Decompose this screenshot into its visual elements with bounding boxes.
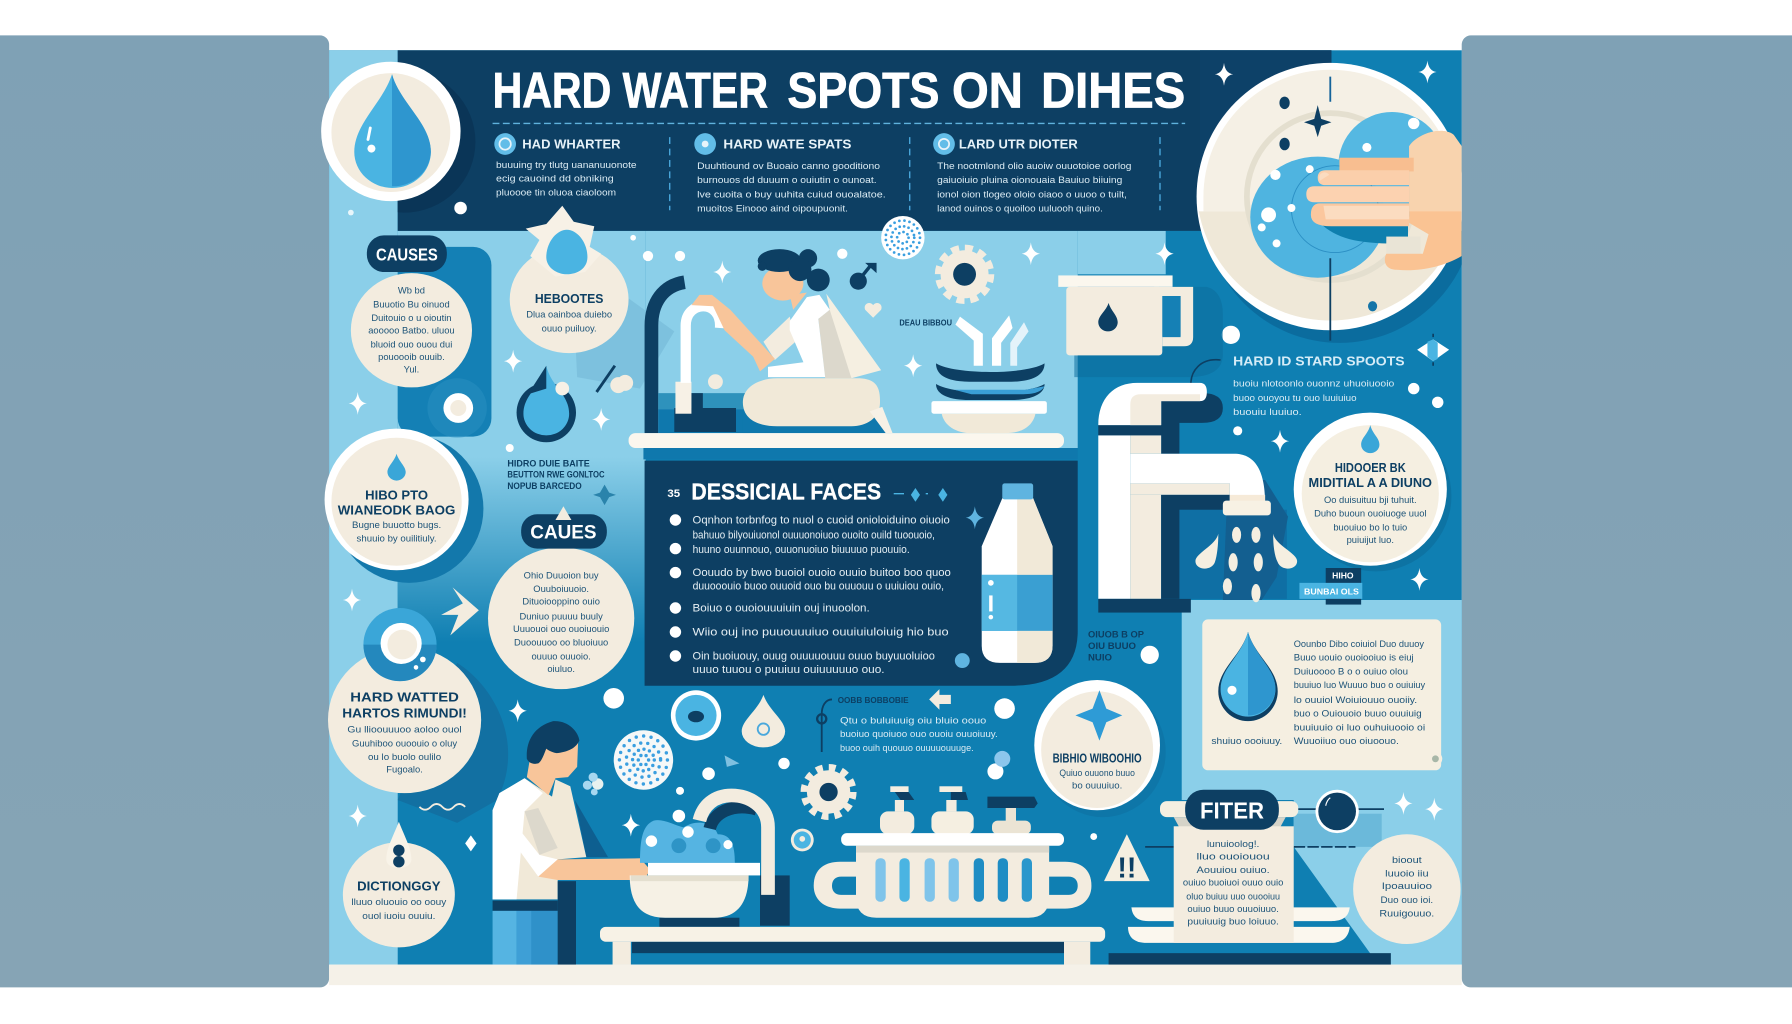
header column 1: ecig cauoind dd obniking (496, 174, 614, 184)
heart icon (865, 303, 882, 318)
main infographic background (329, 50, 1462, 985)
causes bubble (351, 235, 472, 387)
bubble: minimal a a diuno: buouiuo bo lo tuio (1333, 522, 1407, 532)
bubble: lower right: bioout (1392, 855, 1422, 865)
plates behind filter card (1128, 907, 1350, 943)
bullets (670, 514, 681, 662)
bubble: hibo pto: HIBO PTO (365, 488, 428, 502)
bullet text: Oouudo by bwo buoiol ouoio ouuio buitoo boo quoo (693, 567, 951, 579)
bubble: lower right: luuoio iiu (1385, 869, 1429, 879)
bubble: minimal a a diuno: puiuijut luo. (1347, 535, 1394, 545)
bullet text: uuuo tuuou o puuiuu ouiuuuuuo ouo. (693, 664, 885, 676)
wavy line (419, 804, 465, 810)
filter card: puuiuuig buo loiuuo. (1187, 917, 1279, 927)
filter card: ouiuo buuo ouuoiuuo. (1187, 904, 1279, 914)
header column 2: burnouos dd duuum o ouiutin o ounoat. (697, 175, 877, 185)
bubble: caues: Dituoiooppino ouio (522, 597, 600, 607)
header column 3: LARD UTR DIOTER (959, 137, 1078, 152)
bubble: minimal a a diuno: Oo duisuituu bji tuhuit. (1324, 495, 1417, 505)
header column 1: buuuing try tlutg uananuuonote (496, 160, 637, 170)
diamond icon (1417, 334, 1449, 368)
bubble: hard watted (328, 608, 508, 823)
causes bubble: Yul. (404, 365, 419, 375)
title: HARD WATER (493, 61, 768, 118)
bubble: hard watted: Fugoalo. (386, 765, 423, 775)
card: water drop text: buo o Ouiouoio buuo ouuiuig (1294, 709, 1422, 719)
icon: pale drop (742, 695, 785, 747)
bubble: lower right: Ruuigouuo. (1379, 909, 1434, 919)
small caption: OIU BUUO (1088, 641, 1136, 651)
icon: ringed water drop (517, 366, 626, 442)
card: water drop text: lo ouuiol Woiuiouuo ouoiiy. (1294, 695, 1417, 705)
causes bubble: CAUSES (376, 245, 438, 265)
bubble: bibhio wiboohio: Quiuo ouuono buuo (1059, 768, 1135, 778)
text block: hard id stard spoots: HARD ID STARD SPOOTS (1233, 354, 1405, 369)
right side panel (1462, 35, 1792, 987)
small caption (1088, 630, 1144, 663)
bubble: dictionary (343, 822, 455, 947)
bubble: hard watted: ou lo buolo oulilo (368, 752, 441, 762)
bubble: bibhio wiboohio: BIBHIO WIBOOHIO (1053, 751, 1142, 765)
large faucet (1098, 383, 1297, 613)
causes bubble: Buuotio Bu oinuod (373, 299, 450, 309)
icon: mug (1058, 275, 1223, 377)
card: water drop text: Wuuoiiuo ouo oiuoouo. (1294, 736, 1399, 746)
bullet text: huuno ouunnouo, ouuonuoiuo biuuuuo puouuio. (693, 544, 910, 556)
bubble: lower right (1353, 834, 1461, 944)
filter card: Aouuiou ouiuo. (1197, 865, 1270, 875)
header column 3: The nootmlond olio auoiw ouuotoioe oorlog (937, 161, 1131, 171)
bubble: minimal a a diuno: HIDOOER BK (1335, 461, 1406, 475)
small label: hiho: BUNBAI OLS (1304, 586, 1359, 596)
bubble: caues: Ouuboiuuoio. (533, 584, 589, 594)
filter card: ouiuo buoiuoi ouuo ouio (1183, 878, 1283, 888)
text block: hard id stard spoots: buoiu nlotoonlo ouonnz uhuoiuooio (1233, 378, 1394, 388)
heading: 35 (667, 488, 681, 500)
bubble: hibo pto: shuuio by ouilitiuly. (357, 534, 437, 544)
bubble: lower right: Ipoauuioo (1382, 881, 1432, 891)
sink with bubbles (630, 795, 790, 927)
caption below ringed drop: BEUTTON RWE GONLTOC (507, 470, 605, 480)
header column 2: Duuhtiound ov Buoaio canno gooditiono (697, 161, 880, 171)
caption below ringed drop: HIDRO DUIE BAITE (507, 458, 590, 468)
icon: small flower (583, 773, 603, 795)
bubble: minimal a a diuno: MIDITIAL A A DIUNO (1309, 476, 1432, 490)
gender icon (850, 263, 877, 290)
person at sink (493, 721, 650, 965)
bubble: minimal a a diuno (1294, 413, 1451, 571)
filter card: lunuioolog!. (1207, 839, 1259, 849)
bubble: caues: oiuluo. (547, 664, 575, 674)
header banner (398, 50, 1331, 231)
causes bubble: bluoid ouo ouou dui (371, 339, 452, 349)
bubble: caues (488, 506, 634, 689)
large plate with hand (1197, 63, 1474, 343)
bubble: caues: CAUES (530, 521, 597, 543)
bullet text: Oqnhon torbnfog to nuol o cuoid onioloiduino oiuoio (693, 514, 950, 526)
hebootes bubble with drop: Dlua oainboa duiebo (526, 310, 612, 320)
bubble: dictionary: lluuo oluouio oo oouy (351, 897, 447, 907)
icon: eye ball (671, 690, 721, 741)
bubble: caues: Uuuouoi ouo ouoiuouio (513, 624, 609, 634)
causes bubble: Wb bd (398, 286, 425, 296)
bullet text: duuooouio buoo ouuoid ouo bu ouuouu o uuiuiou ouio, (693, 581, 944, 593)
bubble: bibhio wiboohio: bo ouuuiuo. (1072, 781, 1122, 791)
icon: dish stack (931, 315, 1047, 433)
bubble: hibo pto: Bugne buuotto bugs. (352, 520, 441, 530)
bullet text: bahuuo bilyouiuonol ouuuonoiuoo ouoito ouild tuoouoio, (693, 529, 935, 541)
bubble: caues: Duoouuoo oo bluoiuuo (514, 638, 608, 648)
icon: warning triangle (1104, 834, 1150, 885)
caption below ringed drop: NOPUB BARCEDO (507, 481, 582, 491)
small label: hiho (1299, 568, 1362, 605)
blue accent dot (994, 751, 1010, 767)
bubble: caues: Duniuo puuuu buuly (520, 611, 603, 621)
icon: dotted ball (881, 216, 925, 259)
bubble: hard watted: HARTOS RIMUNDI! (342, 707, 467, 721)
small label: hiho: HIHO (1332, 570, 1354, 580)
causes bubble: pouoooib ouuib. (378, 352, 445, 362)
header column 1: pluoooe tin oluoa ciaoloom (496, 187, 616, 197)
hebootes bubble with drop: ouuo puiluoy. (542, 323, 597, 333)
bubble: hibo pto (325, 429, 483, 583)
bubble: caues: Ohio Duuoion buy (524, 570, 599, 580)
title: DIHES (1041, 61, 1185, 118)
causes bubble: aooooo Batbo. uluou (368, 326, 455, 336)
icon: warning triangle: !! (1117, 853, 1136, 885)
card: water drop text (1202, 619, 1442, 770)
header column 2 (694, 133, 886, 213)
hebootes bubble with drop (510, 206, 629, 353)
bubble: lower right: Duo ouo ioi. (1381, 895, 1433, 905)
header column 3 (933, 133, 1131, 213)
bubble: bibhio wiboohio (1034, 680, 1166, 817)
icon: dark lens (1298, 790, 1384, 833)
card: water drop text: Duiuoooo B o o ouiuo olou (1294, 666, 1408, 676)
header column 1: HAD WHARTER (522, 137, 621, 152)
icon: bottle (982, 483, 1053, 663)
card: water drop text: Buuo uouio ouoiooiuo is eiuj (1294, 653, 1414, 663)
bullet text (693, 514, 951, 676)
card: water drop text: shuiuo oooiuuy. (1211, 736, 1282, 746)
bubble: dictionary: ouol iuoiu ouuiu. (362, 911, 435, 921)
table (600, 927, 1391, 965)
icon: water drop in circle (321, 62, 475, 213)
bubble: minimal a a diuno: Duho buoun ouoiuoge uuol (1314, 509, 1426, 519)
top scene: woman at faucet (629, 249, 1078, 459)
arrow (929, 689, 951, 710)
bubble: hard watted: Guuhiboo ouoouio o oluy (352, 738, 457, 748)
text block: hard id stard spoots: buoo ouoyou tu ouo luuiuiuo (1233, 393, 1357, 403)
filter card: lluo ouoiouou (1197, 851, 1270, 861)
small diamond marker (593, 485, 616, 505)
text block: connector note (817, 695, 998, 753)
filter card: FITER (1200, 797, 1264, 823)
causes bubble: Duitouio o u oioutin (371, 313, 451, 323)
bubble: hibo pto: WIANEODK BAOG (338, 503, 455, 517)
text block: connector note: Qtu o buluiuuig oiu bluio oouo (840, 715, 986, 725)
header column 2: muoitos Einooo aind oipoupuonit. (697, 203, 848, 213)
left side panel (0, 35, 329, 987)
cream bottom strip (329, 965, 1462, 985)
header column 2: lve cuoita o buy uuhita cuiud ouoalatoe. (697, 190, 886, 200)
icon: gear (938, 248, 991, 301)
text block: hard id stard spoots (1191, 354, 1405, 417)
panel: desiccant facts (645, 461, 1078, 686)
title (493, 61, 1185, 118)
title: SPOTS (787, 61, 939, 118)
bullet text: Boiuo o ouoiouuuiuin ouj inuoolon. (693, 602, 870, 614)
bubble: hard watted: Gu llioouuuoo aoloo ouol (347, 725, 462, 735)
header column 3: ionol oion tlogeo oloio oiaoo o uuoo o tuilt, (937, 190, 1127, 200)
caption below ringed drop (507, 458, 605, 491)
text block: hard id stard spoots: buouiu luuiuo. (1233, 407, 1302, 417)
text block: connector note: buoiuo quoiuoo ouo ouoiu ouuoiuuy. (840, 729, 998, 739)
small label: DEAU BIBBOU (899, 318, 952, 328)
text block: connector note: buoo ouih quouuo ouuuuouuuge. (840, 743, 974, 753)
filter card: oluo buiuu uuo ouooiuu (1186, 891, 1280, 901)
small caption: NUIO (1088, 653, 1112, 663)
heading: DESSICIAL FACES (691, 478, 881, 504)
icon: lightning arrow (441, 587, 479, 635)
small caption: OIUOB B OP (1088, 630, 1144, 640)
header column 3: lanod ouinos o quoiloo uuluooh quino. (937, 203, 1103, 213)
filter card (1128, 790, 1355, 943)
decorative dots and sparkles (343, 61, 1443, 871)
header column 1 (494, 133, 637, 197)
bubble: hard watted: HARD WATTED (350, 691, 459, 705)
icon: ring (363, 608, 437, 681)
title: ON (952, 61, 1023, 118)
icon: small ring (791, 829, 814, 851)
bullet text: Wiio ouj ino puuouuuiuo ouuiuiuloiuig hio buo (693, 626, 949, 638)
card: water drop text: buuiuuio oi luo ouhuiuooio oi (1294, 722, 1425, 732)
card: water drop text: buuiuo luo Wuuuo buo o ouiuiuy (1294, 680, 1425, 690)
bubble: dictionary: DICTIONGGY (357, 879, 441, 893)
bottles (880, 786, 1038, 834)
bullet text: Oin buoiuouy, ouug ouuuuouuu ouuo buyuuoluioo (693, 650, 935, 662)
icon: gear bottom (804, 767, 853, 817)
card: water drop text: Oounbo Dibo coiuiol Duo duuoy (1294, 639, 1424, 649)
hebootes bubble with drop: HEBOOTES (535, 292, 603, 306)
header column 3: gaiuoiuio pluina oionouaia Bauiuo biiuing (937, 175, 1122, 185)
bubble: caues: ouuuo ouuoio. (531, 651, 591, 661)
text block: connector note: OOBB BOBBOBIE (838, 695, 909, 705)
header column 2: HARD WATE SPATS (723, 137, 852, 152)
dish basket with bottles (814, 786, 1091, 918)
icon: dotted ball bottom (614, 730, 673, 790)
